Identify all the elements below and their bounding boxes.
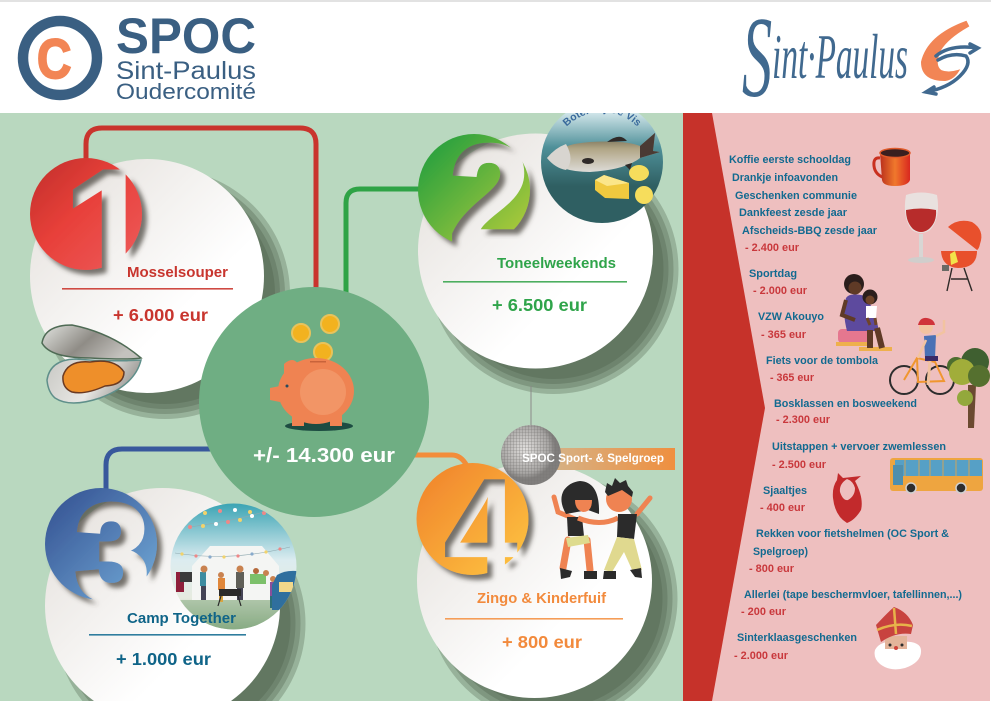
- mussel flesh: [63, 361, 124, 393]
- panel: pink spending column: [683, 113, 990, 701]
- barbecue lid: [948, 221, 981, 250]
- child: [862, 290, 878, 304]
- item: Fiets voor de tombola: Fiets voor de tombola: [766, 355, 879, 367]
- illustration: mussel: [42, 325, 141, 403]
- coin: [321, 315, 339, 333]
- icon: red scarf: [833, 473, 862, 523]
- mother: [844, 294, 879, 331]
- medallion background: [541, 101, 663, 223]
- item: Bosklassen en bosweekend: Bosklassen en bosweekend: [774, 398, 917, 410]
- item: Rekken voor fietshelmen: - 800 eur: [749, 563, 795, 575]
- label: Camp Together: [127, 611, 236, 627]
- pig body: [270, 358, 354, 426]
- icon: bus: [890, 458, 983, 493]
- coin: [314, 343, 332, 361]
- item: Uitstappen: Uitstappen + vervoer zwemlessen: [772, 441, 946, 453]
- rider: [924, 335, 936, 358]
- item: Fiets voor de tombola: - 365 eur: [770, 372, 815, 384]
- string for disco ball: [530, 386, 532, 428]
- header band: [0, 0, 991, 113]
- Sint-Paulus: Sint-Paulus: [116, 57, 256, 85]
- icon: Sinterklaas head: [875, 607, 921, 669]
- illustration: dancers: [554, 478, 650, 579]
- bike wheels: [890, 366, 918, 394]
- connector: blue: [106, 449, 212, 490]
- label: Toneelweekends: [497, 256, 616, 272]
- item: Sportdag: [749, 268, 808, 297]
- amount: + 6.500 eur: [492, 295, 587, 315]
- item: Allerlei: Allerlei (tape beschermvloer, tafellinnen,...): [744, 589, 962, 601]
- item: Sinterklaasgeschenken: - 2.000 eur: [734, 650, 789, 662]
- group: first items: Afscheids-BBQ zesde jaar: [742, 225, 878, 237]
- item: Sportdag: Sportdag: [749, 268, 797, 280]
- item: VZW Akouyo: VZW Akouyo: [758, 311, 824, 323]
- group: first items: Dankfeest zesde jaar: [739, 207, 848, 219]
- panel: white circle 1: [30, 159, 290, 419]
- panel: white circle 2: [418, 134, 678, 394]
- connector: green: [346, 189, 420, 295]
- connector: red: [86, 128, 316, 290]
- icon: disco ball: [501, 425, 561, 485]
- group: first items: [729, 154, 878, 254]
- panel: white circle 4: [417, 463, 678, 701]
- fish: [547, 133, 660, 172]
- group: first items: Koffie eerste schooldag: [729, 154, 851, 166]
- item: Bosklassen en bosweekend: [774, 398, 917, 426]
- total amount: +/- 14.300 eur: [253, 445, 395, 467]
- light strings: [175, 510, 290, 556]
- item: Allerlei: - 200 eur: [741, 606, 787, 618]
- item: Rekken voor fietshelmen: Spelgroep): [753, 546, 808, 558]
- item: Uitstappen: - 2.500 eur: [772, 459, 827, 471]
- icon: mother and child: [836, 274, 892, 351]
- barbecue bowl: [941, 251, 977, 268]
- icon: tree: [947, 348, 990, 428]
- group: first items: Geschenken communie: [735, 190, 857, 202]
- panel: central total circle: [199, 287, 429, 517]
- banner label: SPOC Sport- & Spelgroep: [522, 453, 664, 465]
- amount: + 6.000 eur: [113, 305, 208, 325]
- number badge 3: [45, 488, 157, 600]
- label block: Toneelweekends: [443, 256, 627, 315]
- label block: Mosselsouper: [62, 265, 233, 325]
- red wedge: [683, 113, 765, 701]
- mitre: [876, 607, 913, 642]
- item: Rekken voor fietshelmen: [749, 528, 949, 575]
- logo letter C: C: [37, 28, 71, 91]
- amount: + 800 eur: [502, 632, 582, 652]
- label: Zingo & Kinderfuif: [477, 591, 606, 607]
- blue swirl arrows: [926, 44, 978, 94]
- bike frame: [904, 358, 944, 382]
- number badge 4: [416, 463, 528, 575]
- dancer boy: [603, 478, 650, 579]
- item: Uitstappen: [772, 441, 946, 471]
- butter curls: [629, 165, 653, 204]
- SPOC: SPOC: [116, 8, 256, 64]
- scene background: [170, 504, 296, 630]
- connector lines: [86, 128, 467, 490]
- icon: red mug: [874, 148, 910, 186]
- icon: wine glass: [905, 192, 938, 263]
- connector: orange: [412, 455, 467, 466]
- ground: [180, 600, 280, 630]
- illustration: fish and butter medallion: [541, 113, 663, 223]
- logo: swirl arrows: [922, 22, 978, 94]
- icon: cyclist: [890, 318, 954, 394]
- logo: SPOC ring: [23, 21, 97, 95]
- panel: white circle 3: [45, 488, 305, 701]
- item: VZW Akouyo: - 365 eur: [761, 329, 807, 341]
- label: Mosselsouper: [127, 265, 228, 281]
- item: Sjaaltjes: [760, 485, 807, 514]
- banner: SPOC Sport- & Spelgroep: [555, 448, 675, 470]
- spending list: [729, 154, 962, 662]
- coin: [292, 324, 310, 342]
- illustration: camp together scene: [170, 504, 298, 632]
- item: Rekken voor fietshelmen: Rekken voor fietshelmen (OC Sport &: [756, 528, 949, 540]
- item: Sjaaltjes: - 400 eur: [760, 502, 806, 514]
- tent: [192, 546, 279, 600]
- group: first items: - 2.400 eur: [745, 242, 800, 254]
- Oudercomité: Oudercomité: [116, 79, 256, 104]
- beard: [875, 642, 921, 669]
- group: first items: Drankje infoavonden: [732, 172, 838, 184]
- item: Sportdag: - 2.000 eur: [753, 285, 808, 297]
- mussel top shell: [42, 325, 141, 359]
- item: Sinterklaasgeschenken: [734, 632, 857, 662]
- green background panel: [0, 113, 683, 701]
- butter block: [595, 175, 629, 199]
- medallion title: Boter Bij De Vis: [562, 113, 640, 126]
- item: Bosklassen en bosweekend: - 2.300 eur: [776, 414, 831, 426]
- item: Sinterklaasgeschenken: Sinterklaasgeschenken: [737, 632, 857, 644]
- number badge 1: [30, 158, 142, 270]
- pig shadow: [285, 421, 353, 431]
- amount: + 1.000 eur: [116, 649, 211, 669]
- item: Fiets voor de tombola: [766, 355, 879, 384]
- dancer girl: [554, 481, 618, 579]
- orange swirl arrow: [922, 22, 968, 80]
- logo wordmark: [116, 8, 256, 104]
- item: Sjaaltjes: Sjaaltjes: [763, 485, 807, 497]
- barbecue table: [219, 589, 241, 596]
- seat: [838, 329, 868, 343]
- people: [176, 566, 277, 608]
- item: Allerlei: [741, 589, 962, 618]
- icon: barbecue: [941, 221, 981, 291]
- icon: coins and piggy bank: [270, 315, 354, 431]
- camper van: [272, 571, 297, 610]
- label block: Camp Together: [89, 611, 246, 669]
- mussel bottom shell: [47, 359, 141, 403]
- face: [885, 636, 907, 649]
- label block: Zingo & Kinderfuif: [445, 591, 623, 652]
- item: VZW Akouyo: [758, 311, 824, 341]
- number badge 2: [418, 134, 530, 246]
